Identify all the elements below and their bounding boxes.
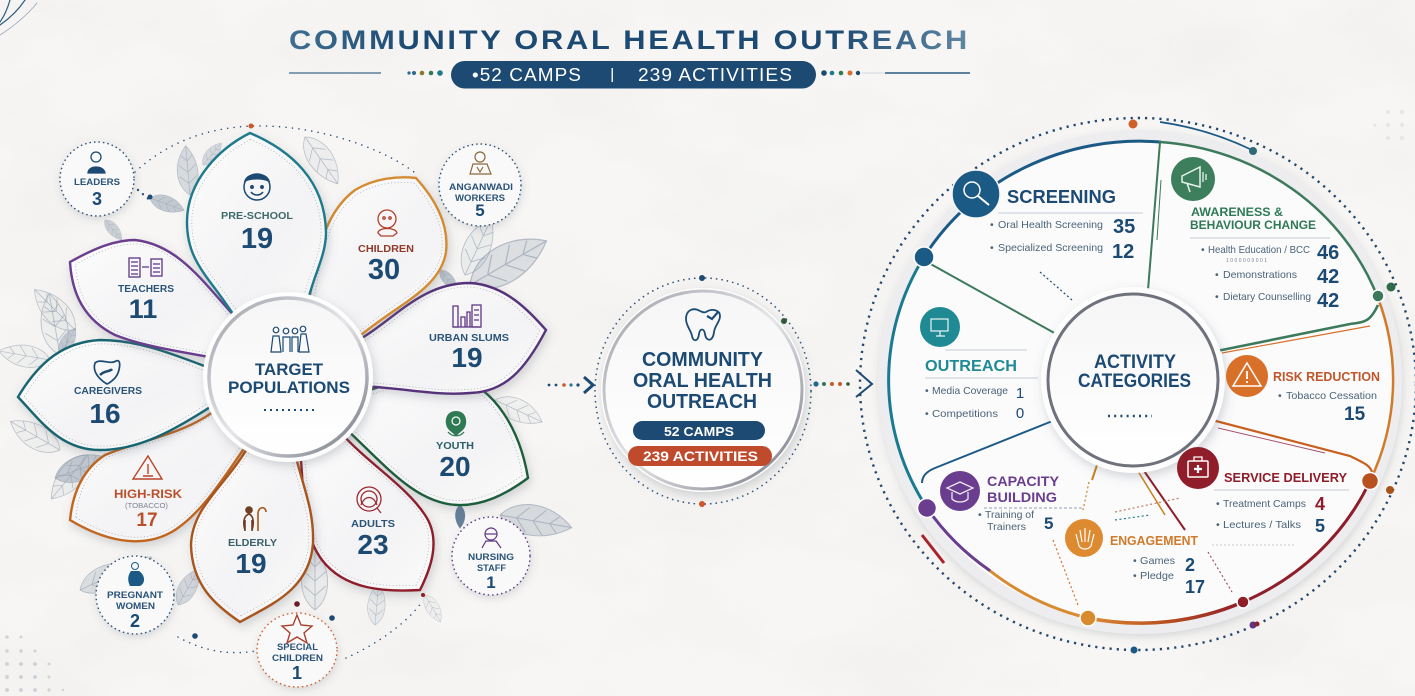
- segment: outreach: •: [925, 385, 929, 397]
- label: caregivers: CAREGIVERS: [74, 386, 142, 397]
- icon: adults: [357, 487, 381, 513]
- segment: service delivery: Treatment Camps: [1223, 498, 1306, 510]
- segment: outreach: Competitions: [932, 408, 998, 420]
- label: youth: YOUTH: [436, 440, 474, 452]
- segment: screening: [952, 170, 1143, 263]
- petal: children: [309, 177, 446, 340]
- icon: leader: [88, 152, 105, 173]
- satellite: leaders: 3: [92, 189, 102, 209]
- hub: activity categories: [1041, 287, 1225, 473]
- icon: group of people: [271, 326, 309, 352]
- top orbit dot: [248, 124, 254, 128]
- hub: activity categories: CATEGORIES: [1078, 371, 1191, 392]
- pill: 239 activities: [628, 446, 772, 466]
- centre heading: [633, 349, 772, 413]
- label: children: CHILDREN: [358, 244, 414, 255]
- segment: awareness and behaviour change: •: [1215, 291, 1219, 303]
- segment: service delivery: SERVICE DELIVERY: [1224, 470, 1347, 485]
- satellite: nursing staff: NURSING: [468, 552, 514, 563]
- number: 19: 19: [235, 548, 267, 579]
- segment: service delivery: •: [1216, 519, 1220, 531]
- segment: risk reduction: 15: [1344, 404, 1366, 425]
- dot grid bottom left: [5, 635, 64, 692]
- petal: elderly: [191, 440, 313, 622]
- icon: media screen: [920, 307, 960, 347]
- orbit dotted lines: [135, 126, 422, 658]
- segment: capacity building: Trainers: [987, 521, 1026, 533]
- segment: risk reduction: •: [1278, 390, 1282, 402]
- panel: activity categories wheel: [860, 118, 1415, 654]
- satellite: pregnant women: WOMEN: [116, 601, 155, 612]
- segment: awareness and behaviour change: 42: [1317, 266, 1339, 288]
- subtitle banner: 239 ACTIVITIES: [638, 65, 793, 85]
- segment: capacity building: •: [978, 509, 982, 521]
- icon: warning: [1226, 355, 1268, 397]
- outer ring accents: [922, 120, 1396, 654]
- icon: hands: [1065, 519, 1103, 557]
- segment: service delivery: Lectures / Talks: [1223, 519, 1301, 531]
- arrow: centre to activity wheel: [813, 370, 872, 397]
- accent dots: [699, 275, 787, 507]
- segment: outreach: Media Coverage: [932, 385, 1008, 397]
- segment: engagement: •: [1133, 570, 1137, 582]
- segment: service delivery: •: [1216, 498, 1220, 510]
- segment: engagement: •: [1133, 555, 1137, 567]
- icon: star: [282, 615, 312, 643]
- satellite: special children: CHILDREN: [272, 653, 323, 664]
- segment: screening: 12: [1112, 241, 1134, 263]
- icon: nurse: [482, 528, 501, 548]
- pill: 52 camps: [633, 421, 765, 440]
- hub: activity categories: ACTIVITY: [1094, 352, 1176, 373]
- segment: outreach: •: [925, 408, 929, 420]
- segment: awareness and behaviour change: •: [1201, 244, 1205, 256]
- icon: magnifier: [952, 170, 1000, 218]
- icon: child: [378, 210, 397, 236]
- label: pre-school: PRE-SCHOOL: [221, 211, 293, 222]
- petal: high-risk: [70, 408, 250, 541]
- number: 19: 19: [451, 342, 483, 373]
- centre heading: ORAL HEALTH: [633, 370, 772, 392]
- petal: urban slums: [355, 283, 546, 394]
- satellite: nursing staff: [452, 517, 530, 595]
- segment: awareness and behaviour change: 46: [1317, 242, 1339, 264]
- segment: engagement: Pledge: [1140, 570, 1174, 582]
- satellite: pregnant women: PREGNANT: [107, 590, 163, 601]
- satellite: special children: 1: [292, 663, 302, 683]
- icon: warning triangle: [133, 456, 162, 479]
- icon: teacher board: [129, 258, 162, 277]
- disc: [878, 130, 1402, 634]
- segment: screening: •: [990, 219, 994, 231]
- title: COMMUNITY ORAL HEALTH OUTREACH: [289, 25, 970, 55]
- icon: pregnant woman: [128, 562, 144, 586]
- segment: capacity building: BUILDING: [987, 489, 1057, 505]
- satellite: special children: [257, 613, 337, 687]
- segment: screening: 35: [1113, 216, 1135, 238]
- satellite: pregnant women: [96, 556, 174, 634]
- segment: service delivery: [1177, 447, 1349, 545]
- panel: target populations flower: [0, 124, 574, 687]
- petal: pre-school: [187, 133, 326, 325]
- segment: engagement: [1065, 519, 1205, 597]
- subtitle banner: [289, 61, 970, 88]
- petal: adults: [300, 432, 434, 591]
- petal: caregivers: [18, 340, 218, 450]
- number: 11: 11: [129, 294, 157, 324]
- segment: awareness and behaviour change: Health Education / BCC: [1208, 244, 1310, 256]
- segment: engagement: Games: [1140, 555, 1175, 567]
- icon: caring hands: [94, 361, 120, 384]
- satellite: nursing staff: 1: [486, 573, 496, 592]
- rim nodes: [914, 247, 1384, 626]
- icon: urban buildings: [453, 305, 481, 327]
- label: urban slums: URBAN SLUMS: [429, 333, 509, 344]
- segment: risk reduction: [1226, 355, 1380, 425]
- hub: target populations: [203, 292, 373, 462]
- segment: awareness and behaviour change: Dietary Counselling: [1223, 291, 1311, 303]
- icon: worker: [470, 152, 491, 174]
- icon: megaphone: [1171, 157, 1215, 201]
- icon: youth: [446, 411, 466, 436]
- outer dotted ring: [860, 118, 1415, 650]
- coloured rim arcs: [889, 141, 1393, 623]
- segment: risk reduction: Tobacco Cessation: [1286, 390, 1377, 402]
- segment: capacity building: Training of: [985, 509, 1034, 521]
- satellite: leaders: LEADERS: [74, 177, 120, 188]
- segment: outreach: 0: [1016, 405, 1024, 422]
- label: tobacco: (TOBACCO): [125, 503, 168, 510]
- segment: screening: Oral Health Screening: [998, 219, 1103, 231]
- segment: awareness and behaviour change: •: [1215, 269, 1219, 281]
- segment: service delivery: 5: [1315, 516, 1325, 536]
- satellite: anganwadi workers: 5: [475, 201, 485, 220]
- segment: outreach: OUTREACH: [925, 358, 1017, 375]
- segment: screening: •: [990, 242, 994, 254]
- segment: awareness and behaviour change: Demonstrations: [1223, 269, 1297, 281]
- satellite: leaders: [60, 142, 134, 216]
- segment: capacity building: [940, 471, 1060, 533]
- hub: target populations: POPULATIONS: [228, 378, 350, 397]
- subtitle banner: •52 CAMPS: [472, 65, 582, 85]
- petal: teachers: [70, 240, 238, 358]
- label: adults: ADULTS: [351, 519, 395, 530]
- segment: engagement: 17: [1185, 577, 1205, 597]
- segment: screening: SCREENING: [1007, 187, 1116, 207]
- segment: awareness and behaviour change: [1171, 157, 1339, 312]
- segment: service delivery: 4: [1315, 494, 1325, 514]
- segment divider lines: [922, 142, 1378, 530]
- number: 17: 17: [136, 510, 158, 531]
- number: 30: 30: [368, 254, 400, 286]
- dot grid top right: [1373, 110, 1404, 140]
- arrow: target to centre: [548, 377, 593, 393]
- segment: capacity building: 5: [1044, 514, 1053, 533]
- number: 16: 16: [89, 398, 121, 429]
- satellite: anganwadi workers: WORKERS: [455, 193, 505, 204]
- satellite: special children: SPECIAL: [277, 642, 318, 653]
- petal: youth: [345, 376, 528, 505]
- pill: 239 activities: 239 ACTIVITIES: [643, 449, 758, 464]
- segment: engagement: ENGAGEMENT: [1110, 534, 1198, 548]
- label: high-risk: HIGH-RISK: [114, 487, 182, 501]
- segment: awareness and behaviour change: BEHAVIOUR CHANGE: [1190, 218, 1316, 232]
- label: teachers: TEACHERS: [118, 284, 174, 295]
- segment: capacity building: CAPACITY: [987, 473, 1060, 489]
- icon: child face: [244, 174, 270, 200]
- orbit accents: [148, 194, 425, 639]
- hub title: TARGET: [255, 360, 324, 379]
- segment: outreach: 1: [1016, 385, 1024, 402]
- segment: screening: Specialized Screening: [998, 242, 1103, 254]
- centre heading: OUTREACH: [647, 391, 757, 413]
- label: elderly: ELDERLY: [228, 537, 277, 549]
- icon: elderly couple: [244, 507, 266, 531]
- segment: risk reduction: RISK REDUCTION: [1273, 369, 1380, 384]
- leaves behind petals: [0, 130, 574, 626]
- centre heading: COMMUNITY: [642, 349, 764, 371]
- number: 20: 20: [439, 451, 471, 482]
- icon: first aid kit: [1177, 447, 1219, 489]
- satellite: anganwadi workers: ANGANWADI: [449, 182, 513, 193]
- segment: awareness and behaviour change: AWARENESS &: [1191, 205, 1283, 219]
- icon: tooth: [686, 309, 720, 340]
- number: 19: 19: [241, 223, 273, 255]
- panel: centre circle: [595, 275, 811, 507]
- segment: awareness and behaviour change: 42: [1317, 290, 1339, 312]
- icon: graduation cap: [940, 471, 980, 511]
- segment: outreach: [920, 307, 1038, 422]
- number: 23: 23: [357, 529, 389, 560]
- segment: engagement: 2: [1185, 555, 1195, 575]
- decorative corner arcs: [0, 0, 37, 35]
- pill: 52 camps: 52 CAMPS: [664, 424, 734, 439]
- satellite: pregnant women: 2: [130, 611, 140, 631]
- satellite: nursing staff: STAFF: [477, 563, 506, 574]
- segment: awareness and behaviour change: 1000000001: [1226, 258, 1267, 264]
- satellite: anganwadi workers: [439, 144, 521, 226]
